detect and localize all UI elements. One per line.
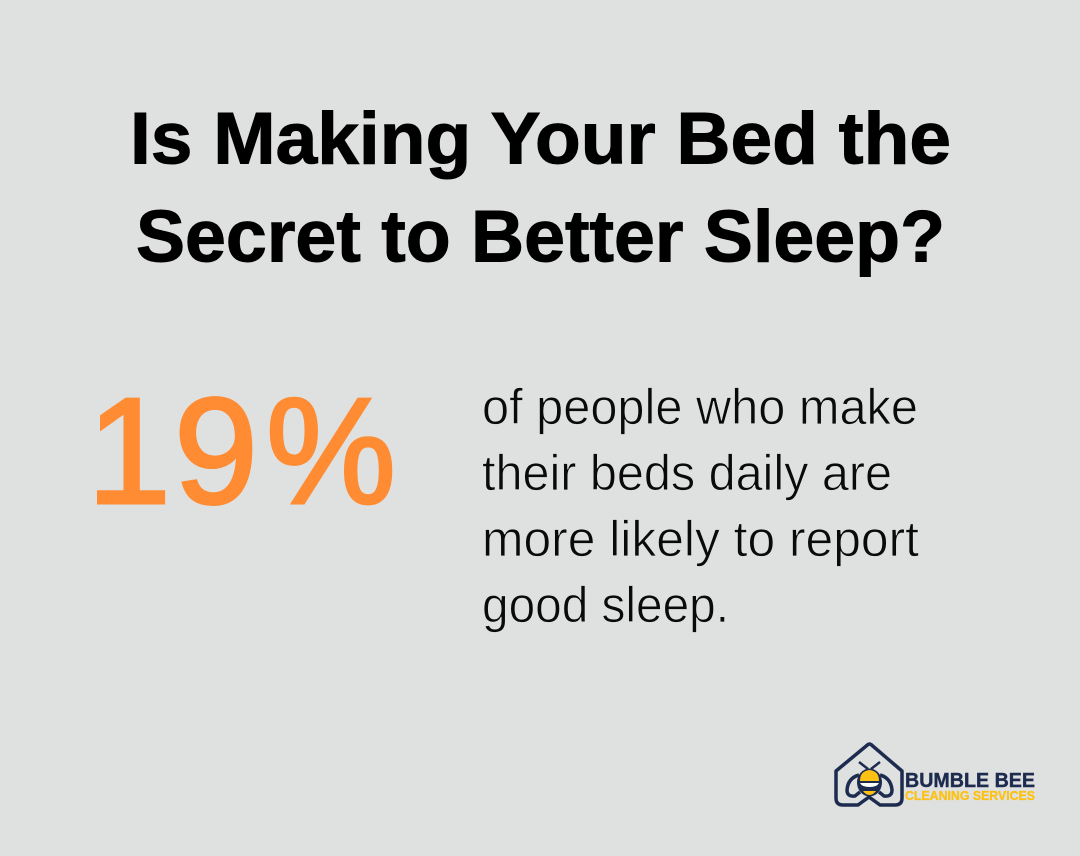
statistic description (482, 379, 919, 633)
title (130, 98, 951, 278)
statistic description: more likely to report (482, 511, 919, 567)
statistic description: of people who make (482, 379, 918, 435)
title: Secret to Better Sleep? (136, 196, 945, 278)
big statistic: 19% (87, 366, 396, 535)
title: Is Making Your Bed the (130, 98, 951, 180)
big statistic: 19%: 19 (87, 366, 258, 535)
logo: Bumble Bee Cleaning Services (836, 744, 1035, 805)
logo text: Cleaning Services: CLEANING SERVICES (905, 789, 1035, 803)
statistic description: their beds daily are (482, 445, 892, 501)
icon: house with bee (836, 744, 902, 805)
big statistic: 19%: % (266, 366, 396, 535)
statistic description: good sleep. (482, 577, 729, 633)
logo text: Bumble Bee: BUMBLE BEE (905, 770, 1035, 792)
